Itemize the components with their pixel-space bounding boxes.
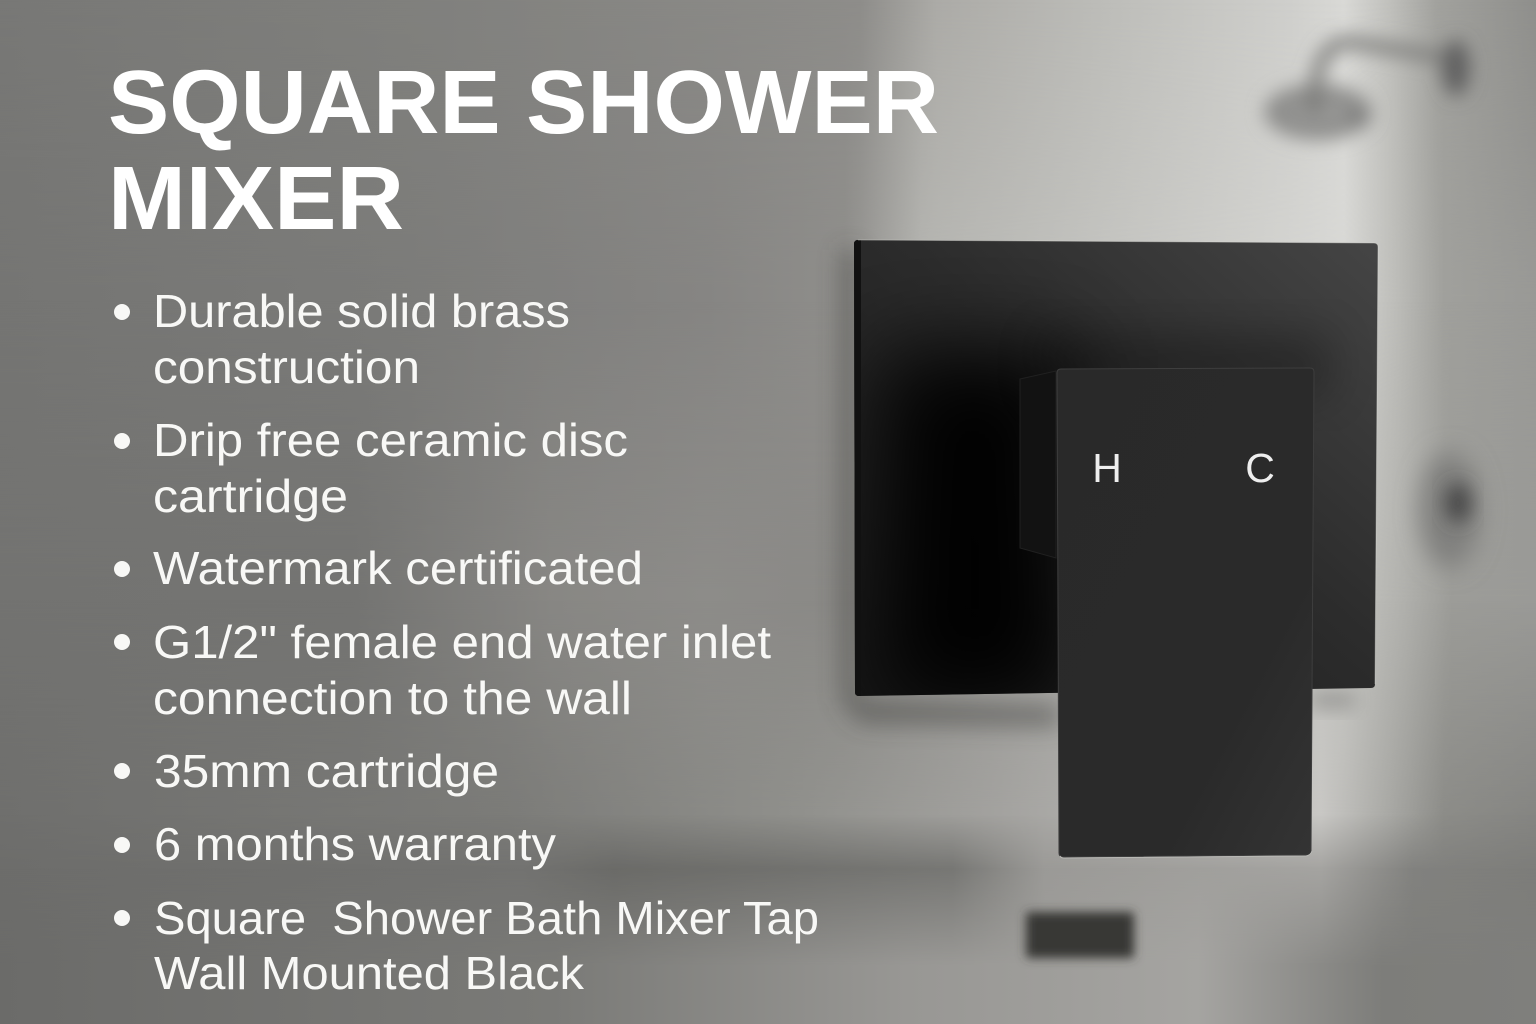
bullet 1 bbox=[114, 285, 570, 393]
bullet 2: cartridge bbox=[153, 470, 348, 522]
bullet 5: 35mm cartridge bbox=[154, 745, 499, 797]
wall plate bbox=[854, 240, 1378, 710]
bullet 6: 6 months warranty bbox=[154, 818, 556, 870]
feature list bbox=[114, 285, 819, 999]
blurred wall fitting bbox=[1420, 452, 1480, 568]
bullet 7: Wall Mounted Black bbox=[154, 947, 585, 999]
bullet 7: Square Shower Bath Mixer Tap bbox=[154, 892, 819, 944]
C marking: C bbox=[1245, 445, 1275, 491]
bullet 3: Watermark certificated bbox=[153, 542, 643, 594]
blurred bath spout bbox=[1026, 912, 1134, 958]
title: MIXER bbox=[108, 149, 404, 249]
lever neck bbox=[1020, 371, 1056, 558]
bullet 1: Durable solid brass bbox=[153, 285, 570, 337]
lever lower edge bbox=[1060, 851, 1312, 858]
lever front face bbox=[1057, 368, 1314, 857]
bullet 1: construction bbox=[153, 341, 420, 393]
bullet 4: G1/2" female end water inlet bbox=[153, 616, 771, 668]
bullet 7 bbox=[114, 892, 819, 999]
plate cast shadow on wall bbox=[842, 250, 1060, 726]
lever cast shadow on wall bbox=[1310, 690, 1354, 710]
title: SQUARE SHOWER bbox=[108, 53, 939, 153]
bullet 2: Drip free ceramic disc bbox=[153, 414, 628, 466]
bullet 4: connection to the wall bbox=[153, 672, 632, 724]
bullet 4 bbox=[114, 616, 771, 724]
title bbox=[108, 53, 939, 249]
bullet 2 bbox=[114, 414, 628, 522]
shower mixer product bbox=[842, 240, 1378, 858]
blurred shower head bbox=[1264, 40, 1470, 140]
H marking: H bbox=[1092, 445, 1122, 491]
